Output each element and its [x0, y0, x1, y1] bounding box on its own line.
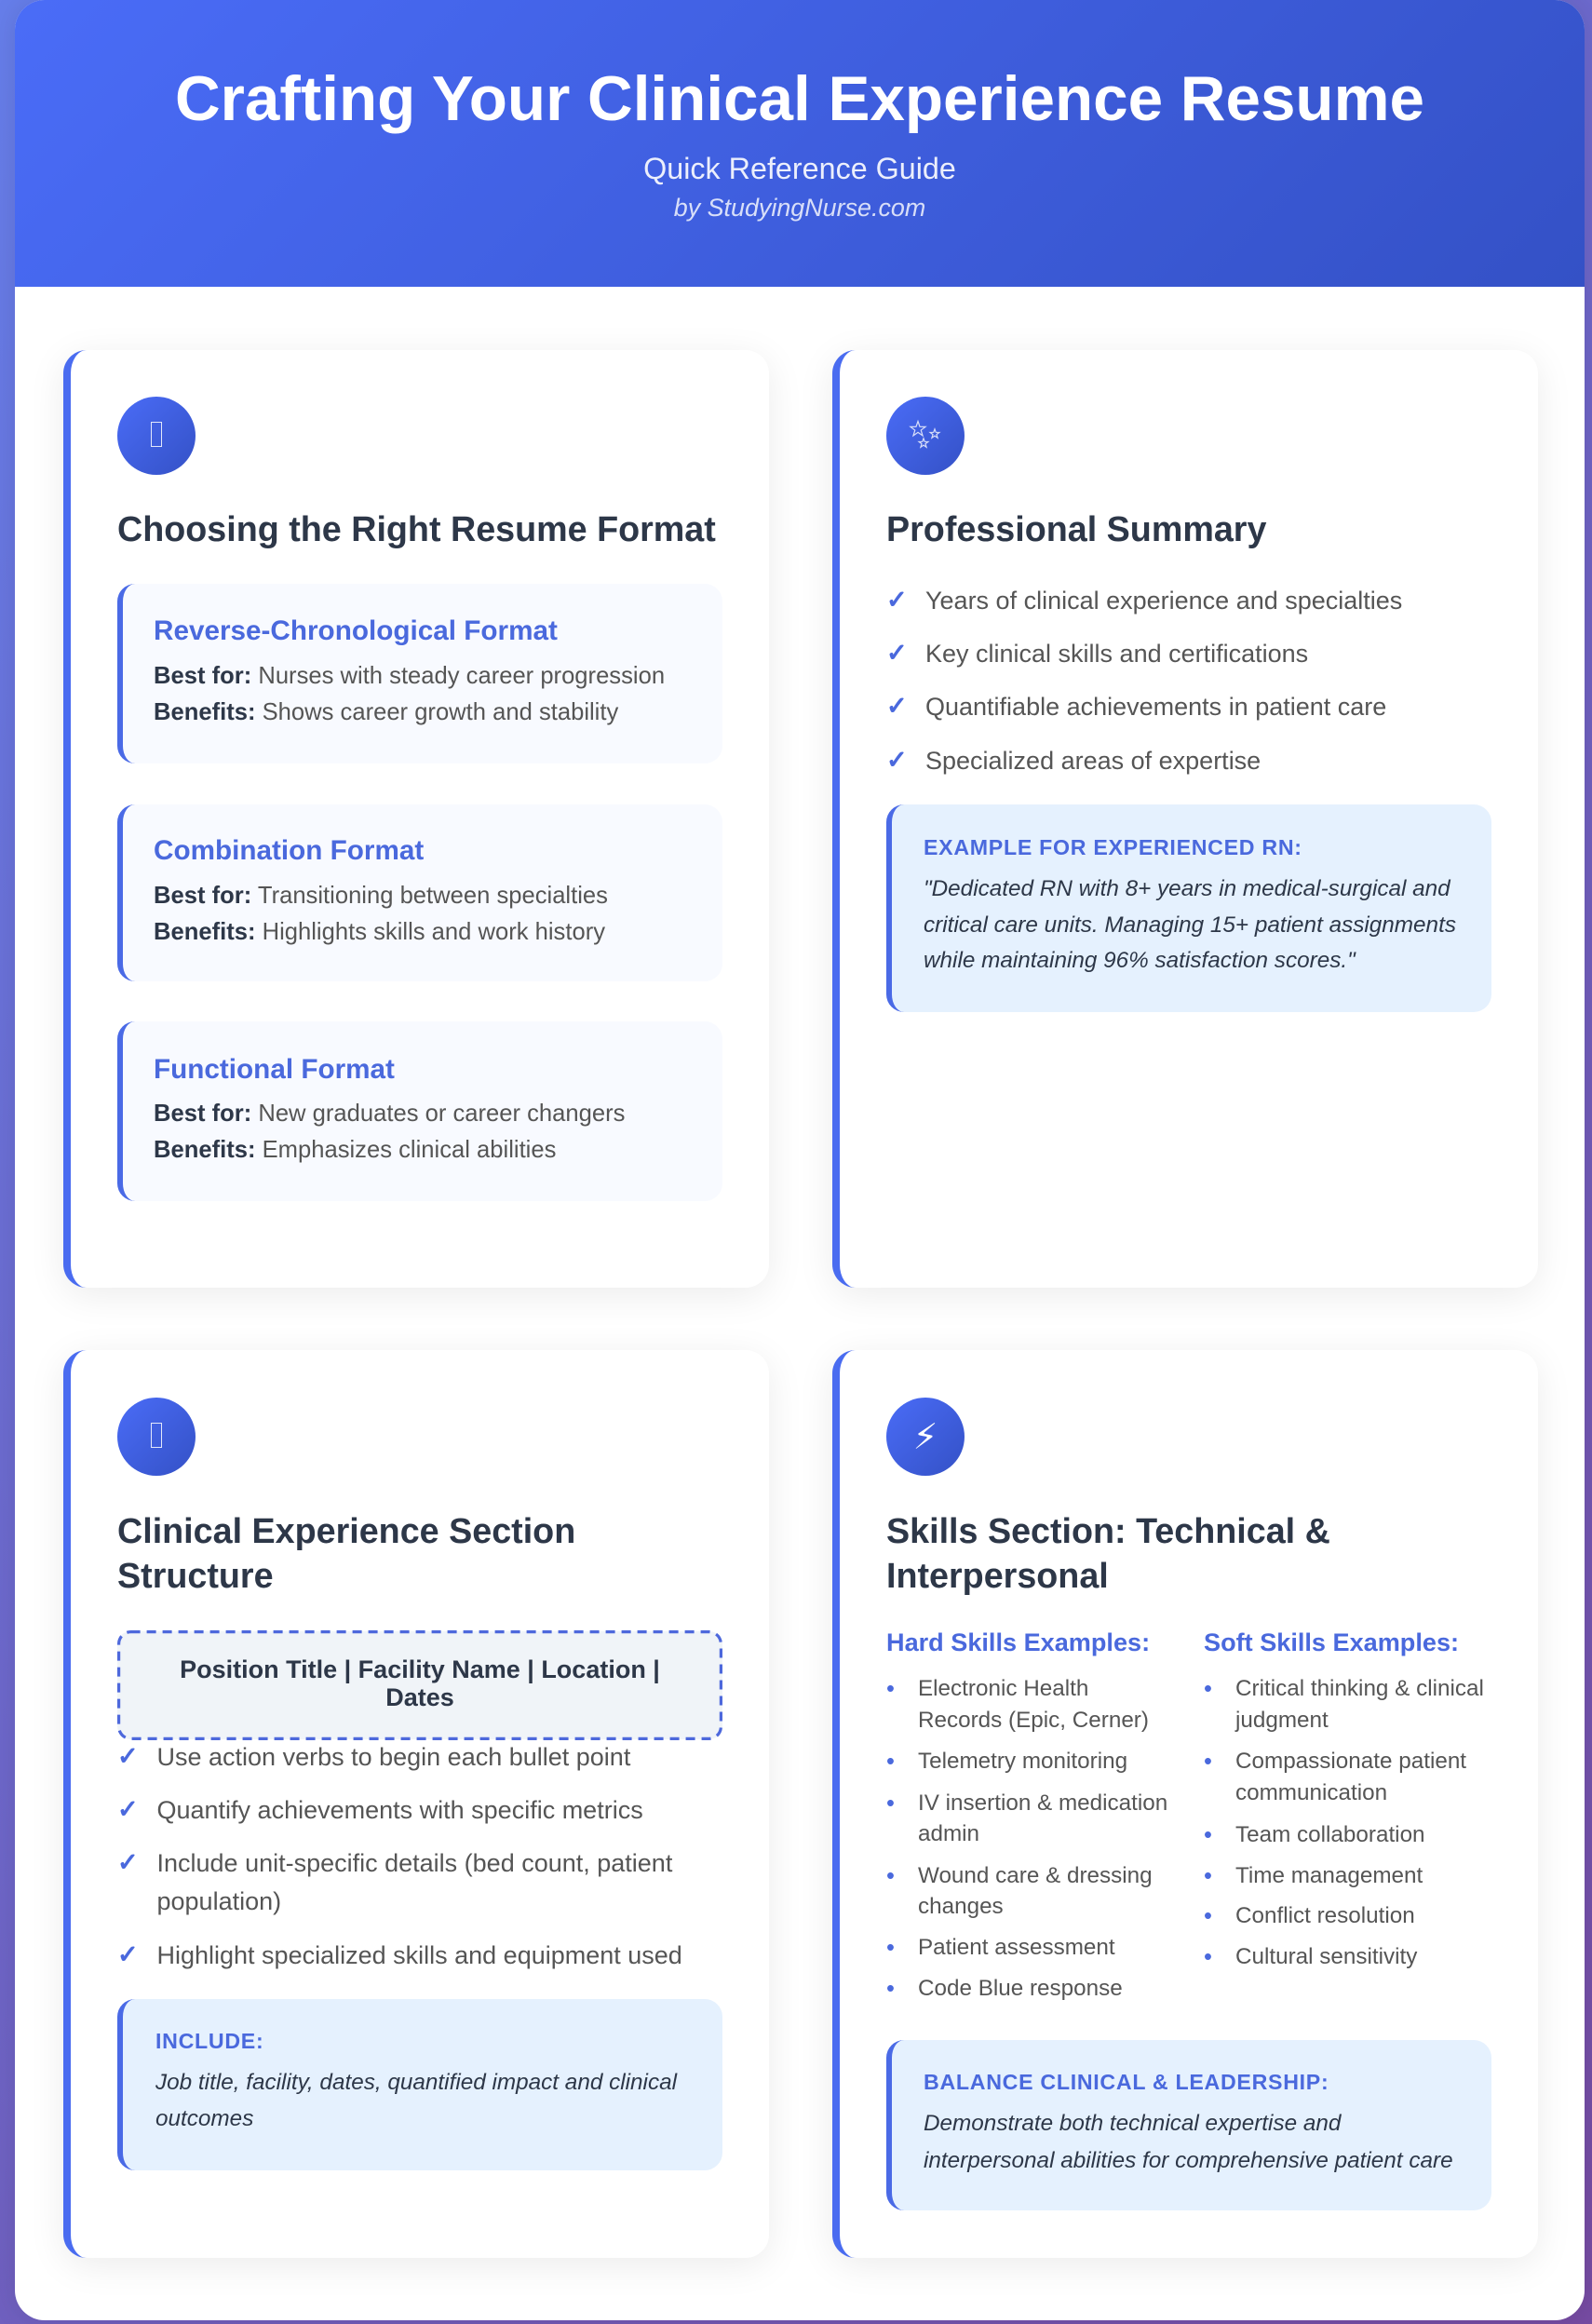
heading: resume format: Choosing the Right Resume Format — [117, 509, 716, 548]
summary checklist: ✓ — [886, 586, 908, 615]
icon: missing glyph box — [117, 397, 196, 475]
panel: professional summary — [832, 350, 1538, 1288]
soft skills column: • — [1204, 1944, 1212, 1970]
soft skills column: Critical thinking & clinical — [1235, 1676, 1484, 1701]
soft skills column — [1204, 1628, 1484, 1970]
summary checklist: Years of clinical experience and specialties — [925, 587, 1402, 615]
experience checklist: Quantify achievements with specific metrics — [156, 1796, 643, 1824]
hard skills column: Patient assessment — [918, 1935, 1115, 1960]
title: Crafting Your Clinical Experience Resume — [175, 64, 1424, 134]
best for: Best for: Transitioning between specialties — [154, 883, 608, 909]
experience checklist: Include unit-specific details (bed count, patient — [156, 1849, 672, 1877]
hard skills column: Records (Epic, Cerner) — [918, 1708, 1149, 1733]
position format template: Dates — [385, 1683, 454, 1711]
soft skills column: Compassionate patient — [1235, 1749, 1466, 1774]
best for: Best for: Nurses with steady career progression — [154, 663, 665, 689]
soft skills column: Conflict resolution — [1235, 1903, 1415, 1928]
callout title: INCLUDE: — [155, 2029, 263, 2053]
experience checklist: Highlight specialized skills and equipment used — [156, 1941, 682, 1969]
hard skills column: • — [886, 1863, 895, 1889]
summary checklist: Key clinical skills and certifications — [925, 640, 1308, 668]
heading: skills — [886, 1511, 1330, 1595]
icon: lightning — [886, 1398, 965, 1476]
soft skills column: Cultural sensitivity — [1235, 1944, 1417, 1969]
panel: resume format — [63, 350, 769, 1288]
soft skills column: • — [1204, 1903, 1212, 1929]
icon: sparkles — [886, 397, 965, 475]
summary checklist: ✓ — [886, 746, 908, 775]
best for: Best for: New graduates or career changers — [154, 1101, 625, 1127]
heading: skills: Skills Section: Technical & — [886, 1511, 1330, 1550]
format: reverse-chronological — [117, 584, 722, 763]
summary checklist: Specialized areas of expertise — [925, 747, 1261, 775]
heading: clinical experience: Clinical Experience Section — [117, 1511, 575, 1550]
callout text: "Dedicated RN with 8+ years in medical-surgical and — [924, 876, 1450, 901]
soft skills column: • — [1204, 1863, 1212, 1889]
format title: Functional Format — [154, 1054, 395, 1085]
summary checklist — [886, 586, 1402, 775]
soft skills column: • — [1204, 1676, 1212, 1702]
experience checklist: ✓ — [117, 1940, 139, 1969]
hard skills column: admin — [918, 1821, 979, 1846]
heading: clinical experience — [117, 1511, 575, 1595]
callout text — [924, 2111, 1453, 2173]
hard skills column: • — [886, 1749, 895, 1775]
panel: skills section — [832, 1350, 1538, 2258]
soft skills column: judgment — [1235, 1708, 1329, 1733]
callout text: Job title, facility, dates, quantified impact and clinical — [155, 2070, 677, 2095]
callout text — [155, 2070, 678, 2131]
byline: by StudyingNurse.com — [674, 194, 925, 222]
icon: missing glyph box — [117, 1398, 196, 1476]
subtitle: Quick Reference Guide — [643, 152, 956, 185]
hard skills column: • — [886, 1790, 895, 1817]
callout: example for experienced RN — [886, 804, 1491, 1012]
panel: clinical experience structure — [63, 1350, 769, 2258]
hard skills column: changes — [918, 1894, 1004, 1919]
icon: lightning: ⚡︎ — [913, 1416, 938, 1457]
hard skills column: Code Blue response — [918, 1976, 1123, 2001]
experience checklist: ✓ — [117, 1742, 139, 1771]
header banner — [15, 0, 1585, 287]
hard skills column: • — [886, 1676, 895, 1702]
format title: Combination Format — [154, 835, 424, 866]
summary checklist: Quantifiable achievements in patient care — [925, 693, 1386, 721]
position format template: Position Title | Facility Name | Location | — [180, 1655, 660, 1683]
summary checklist: ✓ — [886, 692, 908, 721]
heading: clinical experience: Structure — [117, 1556, 274, 1595]
experience checklist: population) — [156, 1887, 281, 1915]
soft skills column: • — [1204, 1749, 1212, 1775]
experience checklist: ✓ — [117, 1848, 139, 1877]
benefits: Benefits: Emphasizes clinical abilities — [154, 1137, 556, 1163]
callout: balance clinical and leadership — [886, 2040, 1491, 2210]
callout text: while maintaining 96% satisfaction scores." — [924, 948, 1356, 973]
benefits: Benefits: Highlights skills and work history — [154, 919, 605, 945]
hard skills column — [886, 1628, 1167, 2002]
soft skills column: Soft Skills Examples: — [1204, 1628, 1459, 1656]
summary checklist: ✓ — [886, 639, 908, 668]
callout: include — [117, 1999, 722, 2170]
heading: skills: Interpersonal — [886, 1556, 1109, 1595]
callout text — [924, 876, 1456, 973]
position format template — [117, 1631, 722, 1739]
hard skills column: Hard Skills Examples: — [886, 1628, 1150, 1656]
hard skills column: IV insertion & medication — [918, 1790, 1167, 1816]
hard skills column: Wound care & dressing — [918, 1863, 1153, 1888]
format: functional — [117, 1021, 722, 1201]
callout text: outcomes — [155, 2106, 253, 2131]
heading: professional summary: Professional Summary — [886, 509, 1266, 548]
benefits: Benefits: Shows career growth and stability — [154, 699, 618, 725]
hard skills column: Electronic Health — [918, 1676, 1088, 1701]
format title: Reverse-Chronological Format — [154, 615, 558, 646]
soft skills column: • — [1204, 1822, 1212, 1848]
callout title: EXAMPLE FOR EXPERIENCED RN: — [924, 835, 1302, 859]
soft skills column: Team collaboration — [1235, 1822, 1425, 1847]
experience checklist: Use action verbs to begin each bullet point — [156, 1743, 630, 1771]
callout title: BALANCE CLINICAL & LEADERSHIP: — [924, 2070, 1329, 2094]
hard skills column: • — [886, 1976, 895, 2002]
soft skills column: communication — [1235, 1780, 1387, 1805]
callout text: Demonstrate both technical expertise and — [924, 2111, 1341, 2136]
format: combination — [117, 804, 722, 981]
callout text: critical care units. Managing 15+ patient assignments — [924, 912, 1456, 938]
soft skills column: Time management — [1235, 1863, 1423, 1888]
callout text: interpersonal abilities for comprehensive patient care — [924, 2147, 1453, 2173]
experience checklist: ✓ — [117, 1795, 139, 1824]
hard skills column: • — [886, 1935, 895, 1961]
experience checklist — [117, 1742, 682, 1969]
hard skills column: Telemetry monitoring — [918, 1749, 1127, 1774]
